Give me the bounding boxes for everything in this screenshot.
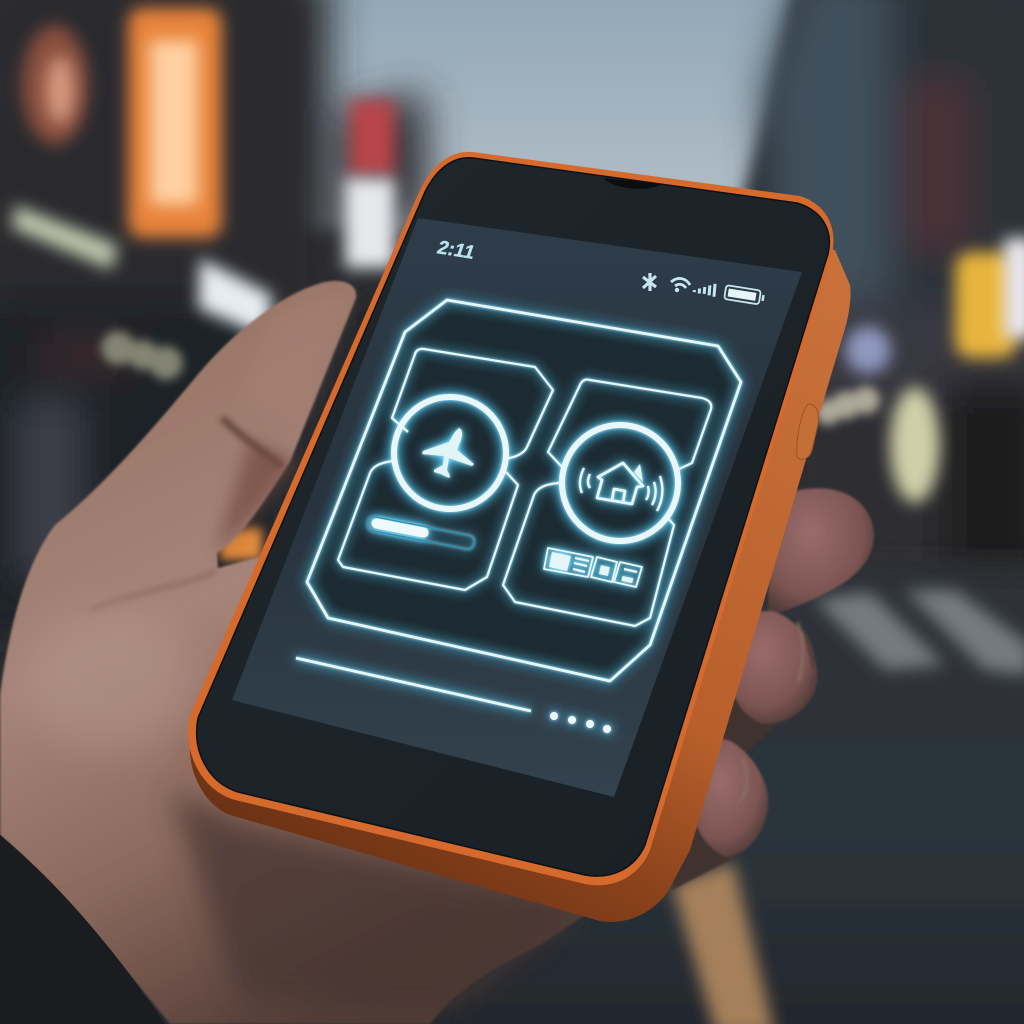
icon: wifi dot (675, 288, 679, 292)
status icons (643, 273, 765, 305)
icon: bluetooth (643, 273, 656, 291)
panel: lower left (338, 461, 518, 590)
icon: signal waves right (646, 476, 662, 511)
icon: home circle (562, 425, 678, 541)
progress bar (367, 516, 475, 550)
street lights (12, 8, 1024, 560)
phone black face (197, 158, 829, 876)
thumb crease (222, 418, 282, 466)
small cards (544, 548, 642, 587)
fingernails (800, 628, 815, 700)
outer frame (307, 300, 741, 681)
fingers behind the phone (672, 488, 874, 890)
phone (188, 152, 851, 922)
sleeve (0, 835, 165, 1024)
panel: upper right (548, 380, 711, 469)
sky (300, 0, 800, 230)
panel: lower right (503, 483, 674, 626)
icon: airplane circle (394, 397, 506, 509)
status time: 2:11 (434, 238, 478, 264)
icon: airplane (422, 428, 474, 478)
hand: palm and thumb (0, 281, 600, 1024)
icon: signal waves left (580, 468, 590, 493)
pagination dots (550, 712, 611, 733)
icon: house (580, 463, 662, 511)
icon: battery (724, 285, 765, 305)
phone orange rim (188, 152, 833, 885)
display (232, 218, 802, 797)
side button (797, 404, 819, 459)
road and crosswalk (420, 560, 1024, 1024)
icon: wifi (671, 278, 690, 288)
bottom line (296, 658, 531, 711)
display inner shade (307, 300, 741, 681)
phone side shell (190, 250, 851, 922)
glowing interface (296, 300, 741, 733)
icon: signal bars (693, 282, 717, 297)
camera notch (603, 178, 662, 189)
panel: upper left (392, 349, 553, 459)
finger: middle (728, 611, 817, 724)
road lane marking (672, 862, 775, 1024)
finger: ring (690, 739, 768, 857)
finger: web shadow (672, 600, 800, 890)
finger: index (768, 488, 874, 615)
